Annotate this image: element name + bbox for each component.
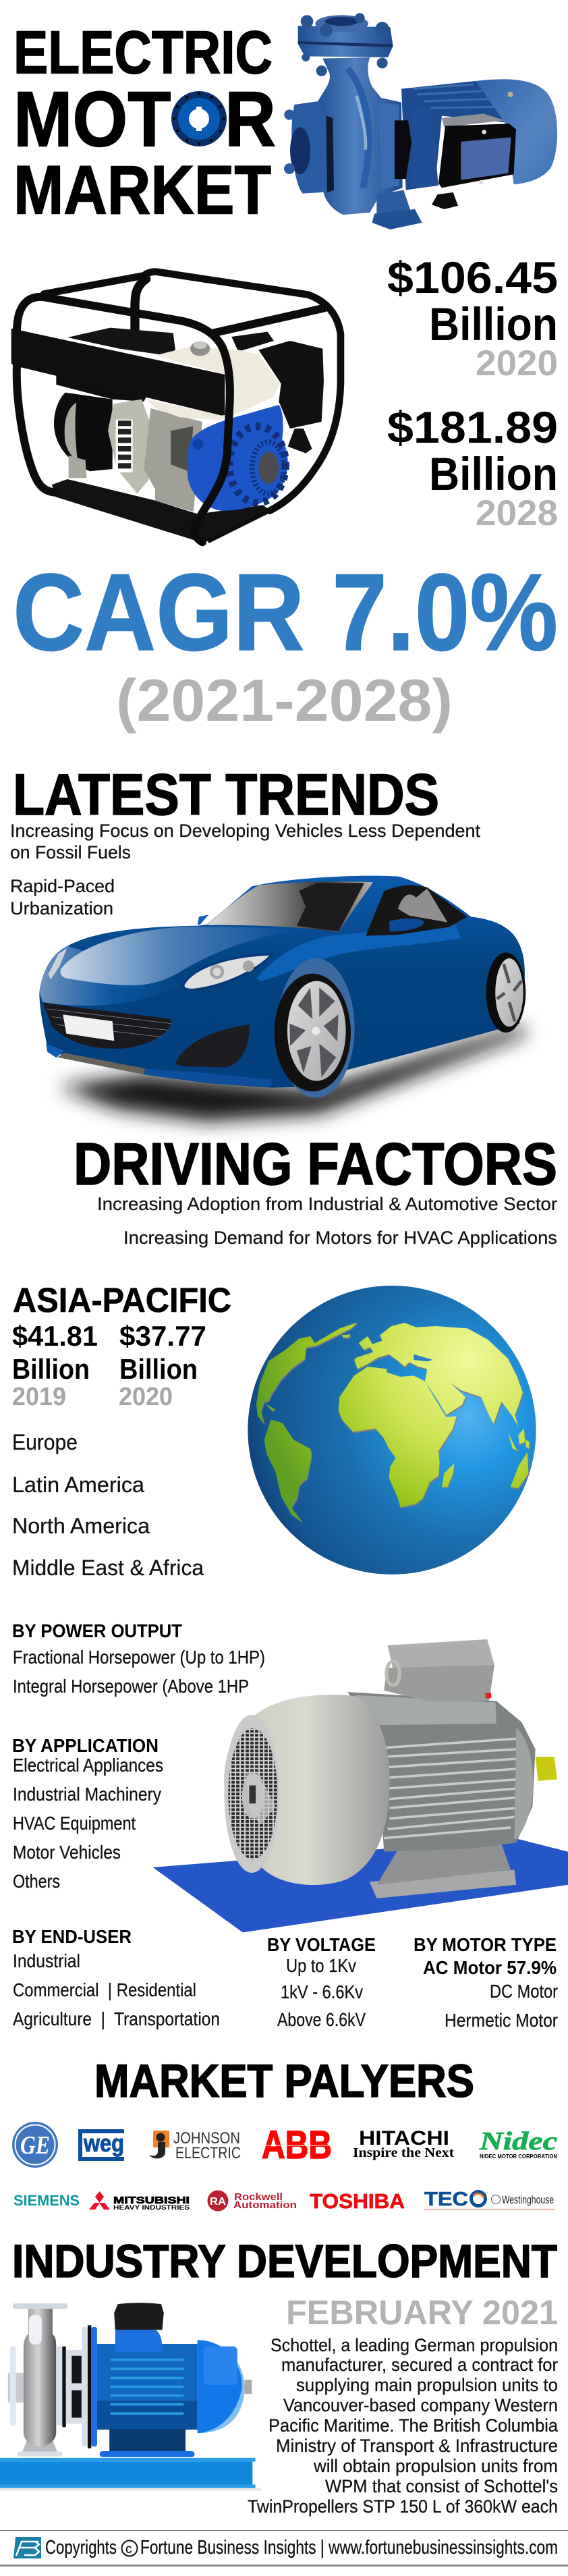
list: by power output: BY POWER OUTPUT — [12, 1620, 182, 1641]
logo: Nidec: NIDEC MOTOR CORPORATION — [480, 2154, 557, 2160]
text: development description: Vancouver-based company Western — [283, 2395, 558, 2415]
title: Electric Motor Market: ELECTRIC — [13, 19, 273, 86]
logo: Hitachi: Inspire the Next — [353, 2145, 454, 2160]
list: by application: Motor Vehicles — [13, 1842, 121, 1863]
list: by end-user: Industrial — [13, 1950, 80, 1971]
list: by power output: Integral Horsepower (Above 1HP — [13, 1676, 249, 1697]
text: development description — [248, 2335, 559, 2517]
list: by application — [12, 1735, 163, 1892]
list: other regions: Middle East & Africa — [12, 1556, 204, 1580]
text: development date: FEBRUARY 2021 — [286, 2293, 558, 2332]
logo: Mitsubishi Heavy Industries: HEAVY INDUSTRIES — [113, 2204, 190, 2211]
text: development description: will obtain propulsion units from — [313, 2456, 558, 2476]
text: trend one: on Fossil Fuels — [10, 842, 131, 862]
text: development description: Pacific Maritime. The British Columbia — [268, 2415, 559, 2436]
logo: Hitachi: HITACHI — [359, 2127, 449, 2149]
logo: Johnson Electric: JOHNSON — [173, 2129, 240, 2147]
list: by voltage: Above 6.6kV — [277, 2009, 366, 2030]
logo: Hitachi — [353, 2127, 454, 2160]
stat: 2028 market value: 2028 — [476, 493, 558, 533]
logo: TECO Westinghouse — [424, 2189, 555, 2210]
list: by end-user — [12, 1926, 220, 2029]
panel: regions — [12, 1281, 536, 1580]
stat: Asia-Pacific 2019: 2019 — [12, 1383, 66, 1411]
logo: Rockwell Automation: Rockwell — [234, 2191, 283, 2203]
text: CAGR period: (2021-2028) — [116, 667, 453, 734]
logo: GE: GE — [20, 2131, 50, 2160]
title: Electric Motor Market: MOTOR — [13, 76, 276, 163]
text: development description: Ministry of Transport & Infrastructure — [276, 2436, 558, 2456]
text: driver two: Increasing Demand for Motors for HVAC Applications — [123, 1228, 557, 1248]
stat: 2028 market value — [387, 402, 558, 533]
text: development description: WPM that consist of Schottel's — [325, 2476, 558, 2496]
stat: Asia-Pacific 2020 — [119, 1320, 206, 1411]
list: by motor type: AC Motor 57.9% — [423, 1957, 557, 1978]
list: other regions: Latin America — [12, 1473, 144, 1497]
illustration: blue pump on base — [0, 2303, 261, 2491]
stat: Asia-Pacific 2019: $41.81 — [12, 1320, 98, 1352]
text: trend two: Rapid-Paced — [10, 876, 115, 896]
panel: segments — [12, 1620, 568, 2031]
text: development description: supplying main propulsion units to — [296, 2375, 558, 2395]
stat: 2020 market value — [387, 252, 558, 383]
heading: latest trends: LATEST TRENDS — [13, 763, 439, 827]
stat: Asia-Pacific 2020: $37.77 — [119, 1320, 206, 1352]
stat: 2028 market value: $181.89 — [387, 402, 558, 452]
list: by power output — [12, 1620, 265, 1697]
title: Electric Motor Market — [13, 19, 276, 228]
logo: Nidec — [479, 2127, 557, 2160]
list: by end-user: Commercial | Residential — [13, 1979, 196, 2000]
panel: industry development — [0, 2235, 559, 2517]
heading: Asia-Pacific: ASIA-PACIFIC — [13, 1281, 231, 1319]
image: portable generator — [11, 272, 341, 542]
stat: Asia-Pacific 2019: Billion — [12, 1353, 90, 1385]
list: by application: Others — [13, 1871, 60, 1892]
stat: 2020 market value: 2020 — [476, 344, 558, 383]
list: by application: Industrial Machinery — [13, 1784, 161, 1805]
list: by application: Electrical Appliances — [13, 1755, 163, 1776]
image: grey industrial motor on blue mat — [153, 1639, 568, 1932]
list: by application: BY APPLICATION — [12, 1735, 159, 1756]
list: by voltage: 1kV - 6.6Kv — [281, 1981, 363, 2002]
title: Electric Motor Market: MARKET — [13, 151, 271, 228]
list: by end-user: BY END-USER — [12, 1926, 132, 1947]
panel: market size — [11, 252, 558, 542]
logo: ABB: ABB — [262, 2123, 332, 2167]
logo: WEG: weg — [83, 2129, 124, 2157]
list: by end-user: Agriculture | Transportation — [13, 2008, 220, 2029]
list: other regions: North America — [12, 1514, 150, 1538]
logo: Mitsubishi Heavy Industries — [89, 2191, 190, 2211]
footer — [0, 2530, 568, 2567]
panel: header — [13, 13, 557, 229]
stat: 2020 market value: Billion — [429, 298, 558, 350]
text: trend two: Urbanization — [10, 898, 113, 919]
stat: 2028 market value: Billion — [429, 448, 558, 500]
logo: Rockwell Automation: RA — [210, 2196, 226, 2208]
logo: GE — [12, 2122, 58, 2168]
panel: latest trends — [10, 763, 528, 1122]
logo: Rockwell Automation — [208, 2191, 297, 2211]
image: blue centrifugal pump — [284, 13, 557, 229]
text: driver one: Increasing Adoption from Industrial & Automotive Sector — [97, 1194, 557, 1214]
logo: Siemens: SIEMENS — [13, 2192, 80, 2209]
list: by application: HVAC Equipment — [13, 1813, 136, 1834]
stat: Asia-Pacific 2020: Billion — [119, 1353, 198, 1385]
text: copyright line: c — [125, 2542, 132, 2556]
text: trend two — [10, 876, 115, 919]
logo: Johnson Electric — [149, 2129, 241, 2162]
list: by voltage — [267, 1934, 376, 2030]
logo: Nidec: Nidec — [479, 2127, 557, 2156]
text: copyright line: Copyrights — [45, 2537, 117, 2558]
text: trend one: Increasing Focus on Developing Vehicles Less Dependent — [10, 821, 480, 841]
list: other regions: Europe — [12, 1430, 78, 1454]
logo: Mitsubishi Heavy Industries: MITSUBISHI — [113, 2195, 190, 2206]
text: trend one — [10, 821, 480, 862]
logo: Fortune Business Insights — [13, 2537, 41, 2558]
image: globe — [248, 1286, 536, 1574]
stat: 2020 market value: $106.45 — [387, 252, 558, 302]
icon: motor shaft disc — [169, 89, 229, 148]
list: by motor type: BY MOTOR TYPE — [414, 1934, 557, 1955]
text: development description: manufacturer, secured a contract for — [281, 2355, 558, 2375]
list: by motor type — [414, 1934, 558, 2031]
stat: Asia-Pacific 2020: 2020 — [119, 1383, 173, 1411]
panel: driving factors — [74, 1130, 557, 1248]
list: by voltage: BY VOLTAGE — [267, 1934, 376, 1955]
list: by power output: Fractional Horsepower (Up to 1HP) — [13, 1647, 265, 1668]
panel: CAGR — [13, 551, 558, 734]
panel: market players — [12, 2055, 557, 2213]
logo: TECO Westinghouse: TEC — [424, 2189, 468, 2210]
list: other regions — [12, 1430, 204, 1580]
image: blue sports car — [39, 876, 528, 1122]
heading: market players: MARKET PALYERS — [94, 2055, 474, 2107]
list: by voltage: Up to 1Kv — [286, 1955, 356, 1976]
stat: Asia-Pacific 2019 — [12, 1320, 98, 1411]
logo: Johnson Electric: ELECTRIC — [175, 2144, 241, 2162]
logo: Rockwell Automation: Automation — [233, 2199, 297, 2211]
logo: Toshiba: TOSHIBA — [310, 2189, 405, 2213]
